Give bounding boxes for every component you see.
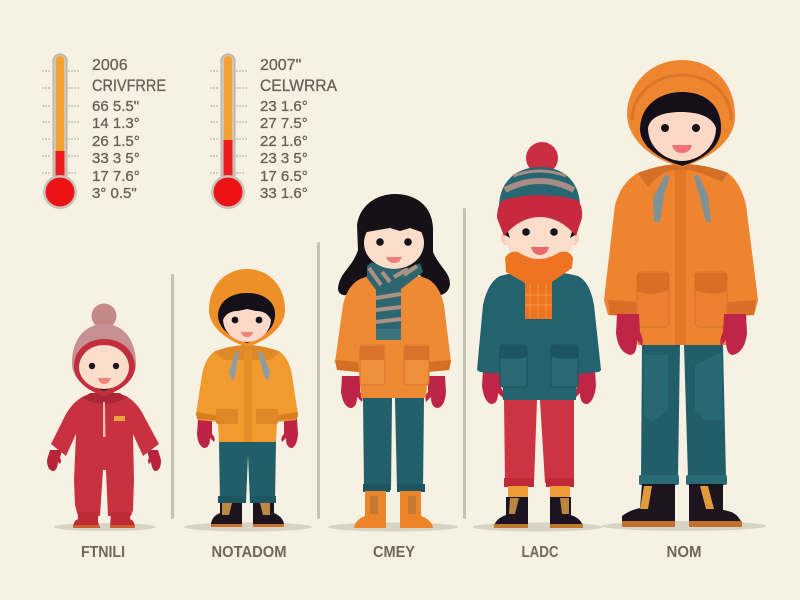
- temperature text right: 22 1.6°: [260, 133, 308, 150]
- label: NOTADOM: NOTADOM: [212, 544, 286, 561]
- temperature text left: 17 7.6°: [92, 168, 140, 185]
- label: FTNILI: FTNILI: [81, 544, 125, 561]
- figure: girl with striped scarf: [328, 194, 458, 532]
- label: NOM: NOM: [666, 544, 702, 561]
- figure: toddler in orange hooded coat: [184, 269, 312, 532]
- dividers: [171, 208, 466, 519]
- temperature text left: 66 5.5": [92, 98, 139, 115]
- figure: infant in red snowsuit: [47, 304, 161, 531]
- temperature text right: 27 7.5°: [260, 115, 308, 132]
- temperature text right: [260, 57, 337, 202]
- temperature text left: 3° 0.5": [92, 185, 137, 202]
- thermometer right: [210, 54, 247, 209]
- temperature text left: CRIVFRRE: [92, 77, 166, 95]
- thermometer left: [42, 54, 79, 209]
- temperature text right: 23 3 5°: [260, 150, 308, 167]
- temperature text left: 2006: [92, 57, 128, 74]
- temperature text right: 2007": [260, 57, 301, 74]
- label: LADC: LADC: [522, 544, 559, 561]
- figure: child with teal coat and striped hat: [473, 142, 603, 532]
- figure: tall child in orange parka: [602, 60, 766, 531]
- label: CMEY: CMEY: [373, 544, 415, 561]
- temperature text left: 26 1.5°: [92, 133, 140, 150]
- temperature text right: 33 1.6°: [260, 185, 308, 202]
- temperature text left: 33 3 5°: [92, 150, 140, 167]
- temperature text right: 17 6.5°: [260, 168, 308, 185]
- temperature text left: 14 1.3°: [92, 115, 140, 132]
- temperature text right: 23 1.6°: [260, 98, 308, 115]
- temperature text right: CELWRRA: [260, 77, 337, 95]
- temperature text left: [92, 57, 166, 202]
